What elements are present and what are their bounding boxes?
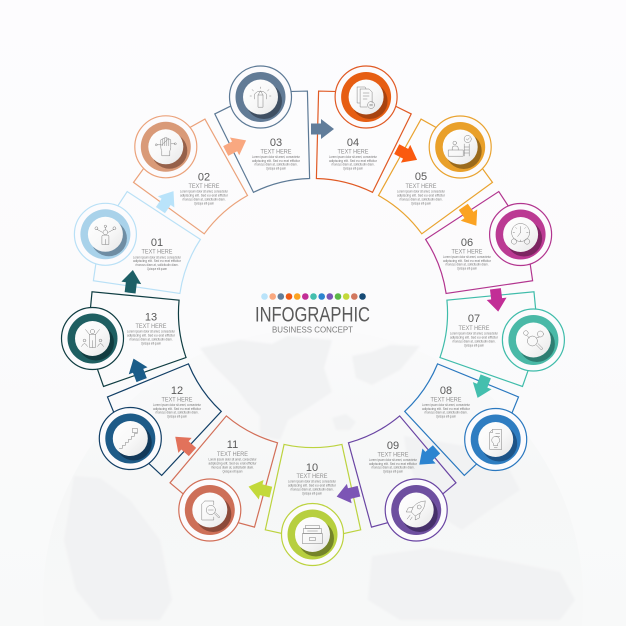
- step 01 outline: [84, 188, 207, 311]
- step 06 text: Quisque elit quam: [457, 267, 477, 271]
- step 06 text: rhoncus diam at, sollicitudin diam.: [446, 263, 489, 267]
- icon: person network: [95, 225, 116, 244]
- step 07 outline: [438, 281, 544, 388]
- step 12 text: Lorem ipsum dolor sit amet, consectetur: [153, 403, 202, 407]
- step 07 text: Quisque elit quam: [464, 343, 484, 347]
- panel: step 06: [419, 188, 552, 311]
- step 02 text: Quisque elit quam: [194, 201, 214, 205]
- step 02 text: Lorem ipsum dolor sit amet, consectetur: [180, 190, 229, 194]
- panel: step 13: [62, 281, 188, 388]
- step 11 text: TEXT HERE: [217, 451, 249, 458]
- step 08 circle: [465, 408, 527, 470]
- step 02 text: [180, 172, 229, 205]
- icon: magnifier with nodes: [524, 331, 543, 350]
- step 10 text: Quisque elit quam: [302, 491, 322, 495]
- step 05 outline: [364, 112, 499, 246]
- step 06 text: Lorem ipsum dolor sit amet, consectetur: [443, 255, 492, 259]
- panel: step 08: [394, 348, 527, 481]
- step 11 text: [208, 439, 257, 473]
- arrow: 04 to 05: [392, 140, 422, 169]
- step 08 outline: [394, 348, 526, 481]
- step 13 circle: [62, 308, 124, 370]
- step 10 text: TEXT HERE: [296, 473, 328, 480]
- step 11 text: adipiscing elit. Sed eu erat efficitur: [208, 462, 257, 466]
- step 05 text: 05: [415, 171, 427, 183]
- panel: step 05: [364, 112, 499, 246]
- step 04 text: adipiscing elit. Sed eu erat efficitur: [329, 159, 378, 163]
- step 10 text: adipiscing elit. Sed eu erat efficitur: [288, 484, 337, 488]
- step 07 text: adipiscing elit. Sed eu erat efficitur: [450, 336, 499, 340]
- step 02 text: TEXT HERE: [188, 183, 220, 190]
- step 04 circle: [335, 66, 397, 128]
- step 13 text: 13: [145, 312, 157, 324]
- step 04 text: Lorem ipsum dolor sit amet, consectetur: [329, 155, 378, 159]
- icon: desk, ladder and clock: [448, 135, 471, 156]
- step 05 text: adipiscing elit. Sed eu erat efficitur: [397, 194, 446, 198]
- step 07 text: rhoncus diam at, sollicitudin diam.: [452, 339, 496, 343]
- step 12 text: rhoncus diam at, sollicitudin diam.: [156, 411, 199, 415]
- step 13 text: Lorem ipsum dolor sit amet, consectetur: [127, 330, 176, 334]
- step 03 text: [252, 137, 301, 171]
- step 04 text: TEXT HERE: [338, 148, 369, 155]
- step 07 text: 07: [468, 313, 480, 325]
- arrow: 03 to 04: [311, 119, 334, 139]
- step 06 text: adipiscing elit. Sed eu erat efficitur: [443, 259, 492, 263]
- step 02 text: 02: [198, 172, 210, 184]
- arrow: 12 to 13: [124, 355, 151, 384]
- step 13 text: rhoncus diam at, sollicitudin diam.: [130, 337, 173, 341]
- step 09 outline: [332, 407, 460, 536]
- panel: step 12: [99, 348, 232, 481]
- arrow: 01 to 02: [152, 186, 182, 216]
- step 13 text: Quisque elit quam: [141, 341, 161, 345]
- step 05 text: [397, 171, 446, 205]
- step 11 text: rhoncus diam at, sollicitudin diam.: [211, 465, 254, 469]
- step 07 circle: [502, 309, 564, 371]
- step 08 text: [422, 385, 471, 419]
- arrow: 11 to 12: [169, 429, 199, 460]
- step 03 text: 03: [270, 137, 282, 149]
- step 06 text: 06: [461, 237, 473, 249]
- icon: rocket: [406, 501, 425, 520]
- arrow: 10 to 11: [246, 477, 273, 502]
- step 01 text: 01: [151, 237, 163, 249]
- step 05 text: Quisque elit quam: [411, 201, 431, 205]
- step 10 circle: [282, 504, 344, 566]
- step 12 outline: [100, 348, 232, 481]
- title: INFOGRAPHIC: [255, 304, 370, 326]
- icon: raised fist: [155, 138, 176, 156]
- step 13 text: adipiscing elit. Sed eu erat efficitur: [127, 334, 176, 338]
- step 03 outline: [212, 82, 328, 197]
- icon: archive drawer: [302, 526, 322, 544]
- step 04 outline: [298, 82, 414, 197]
- step 05 text: rhoncus diam at, sollicitudin diam.: [400, 197, 443, 201]
- panel: step 11: [166, 407, 294, 541]
- step 10 text: 10: [306, 462, 318, 474]
- step 05 circle: [429, 116, 491, 178]
- step 13 text: TEXT HERE: [136, 323, 167, 330]
- step 11 circle: [179, 479, 241, 541]
- icon: document with magnifier: [202, 501, 220, 520]
- panel: step 09: [332, 407, 460, 541]
- step 08 text: adipiscing elit. Sed eu erat efficitur: [422, 407, 471, 411]
- arrow: 02 to 03: [221, 131, 251, 160]
- step 08 text: TEXT HERE: [430, 396, 462, 403]
- step 03 text: Quisque elit quam: [266, 167, 286, 171]
- arrow: 06 to 07: [485, 288, 508, 313]
- arrow: 05 to 06: [455, 201, 485, 231]
- arrow: 09 to 10: [334, 481, 361, 506]
- panel: step 07: [438, 281, 564, 388]
- step 11 text: Quisque elit quam: [222, 469, 243, 473]
- step 10 text: Lorem ipsum dolor sit amet, consectetur: [288, 480, 337, 484]
- step 09 text: adipiscing elit. Sed eu erat efficitur: [369, 462, 418, 466]
- icon: documents: [357, 87, 375, 108]
- step 08 text: rhoncus diam at, sollicitudin diam.: [424, 411, 468, 415]
- arrow: 08 to 09: [413, 442, 443, 472]
- step 09 text: Lorem ipsum dolor sit amet, consectetur: [369, 458, 418, 462]
- step 01 text: TEXT HERE: [142, 249, 173, 256]
- panel: step 04: [298, 66, 414, 197]
- arrow: 07 to 08: [468, 373, 495, 401]
- step 06 circle: [490, 204, 552, 266]
- step 01 circle: [74, 203, 136, 265]
- step 07 text: [450, 313, 499, 347]
- icon: dial gauge: [511, 224, 530, 244]
- step 05 text: TEXT HERE: [406, 183, 437, 190]
- step 12 text: 12: [171, 385, 183, 397]
- step 04 text: Quisque elit quam: [343, 167, 363, 171]
- panel: step 02: [127, 112, 262, 246]
- arrow: 13 to 01: [120, 269, 143, 294]
- step 09 circle: [385, 479, 447, 541]
- step 03 text: TEXT HERE: [260, 148, 292, 155]
- step 02 outline: [127, 112, 262, 246]
- panel: step 10: [265, 444, 361, 566]
- icon: document with bulb: [490, 430, 502, 450]
- step 09 text: TEXT HERE: [378, 451, 409, 458]
- step 12 text: Quisque elit quam: [167, 415, 187, 419]
- step 11 text: Lorem ipsum dolor sit amet, consectetur: [208, 458, 257, 462]
- step 09 text: Quisque elit quam: [383, 470, 403, 474]
- step 12 text: [153, 385, 202, 419]
- step 10 outline: [265, 444, 361, 540]
- step 08 text: Quisque elit quam: [436, 415, 456, 419]
- step 01 text: Quisque elit quam: [147, 267, 167, 271]
- step 01 text: [133, 237, 182, 271]
- step 02 text: adipiscing elit. Sed eu erat efficitur: [180, 194, 229, 198]
- step 02 circle: [135, 116, 197, 178]
- step 07 text: Lorem ipsum dolor sit amet, consectetur: [450, 332, 499, 336]
- step 01 text: adipiscing elit. Sed eu erat efficitur: [133, 259, 182, 263]
- step 02 text: rhoncus diam at, sollicitudin diam.: [182, 197, 226, 201]
- panel: step 03: [212, 66, 328, 197]
- step 06 text: TEXT HERE: [452, 248, 483, 255]
- step 04 text: 04: [347, 137, 359, 149]
- step 03 text: rhoncus diam at, sollicitudin diam.: [254, 163, 298, 167]
- world globe backdrop: [43, 330, 583, 626]
- step 11 outline: [166, 407, 294, 536]
- step 04 text: [329, 137, 378, 171]
- step 01 text: rhoncus diam at, sollicitudin diam.: [136, 263, 179, 267]
- step 09 text: 09: [387, 440, 399, 452]
- step 12 text: adipiscing elit. Sed eu erat efficitur: [153, 407, 202, 411]
- step 05 text: Lorem ipsum dolor sit amet, consectetur: [397, 190, 446, 194]
- step 03 text: adipiscing elit. Sed eu erat efficitur: [252, 159, 301, 163]
- step 06 outline: [419, 188, 542, 311]
- step 01 text: Lorem ipsum dolor sit amet, consectetur: [133, 255, 182, 259]
- step 11 text: 11: [227, 439, 238, 451]
- step 10 text: [288, 462, 337, 495]
- step 03 circle: [230, 66, 292, 128]
- step 09 text: rhoncus diam at, sollicitudin diam.: [372, 466, 415, 470]
- step 08 text: 08: [440, 385, 452, 397]
- step 04 text: rhoncus diam at, sollicitudin diam.: [332, 163, 375, 167]
- step 10 text: rhoncus diam at, sollicitudin diam.: [290, 487, 334, 491]
- panel: step 01: [74, 188, 207, 311]
- step 09 text: [369, 440, 418, 474]
- step 03 text: Lorem ipsum dolor sit amet, consectetur: [252, 155, 301, 159]
- colour dots row: [261, 293, 366, 300]
- step 13 text: [127, 312, 176, 345]
- step 12 text: TEXT HERE: [162, 396, 193, 403]
- step 08 text: Lorem ipsum dolor sit amet, consectetur: [422, 403, 471, 407]
- step 06 text: [443, 237, 492, 271]
- icon: stairs with flag: [119, 428, 137, 448]
- step 07 text: TEXT HERE: [458, 325, 490, 332]
- icon: cheering person: [82, 329, 104, 348]
- step 13 outline: [82, 281, 188, 388]
- subtitle: BUSINESS CONCEPT: [272, 326, 353, 334]
- step 12 circle: [99, 408, 161, 470]
- icon: pencil bulb: [250, 87, 271, 107]
